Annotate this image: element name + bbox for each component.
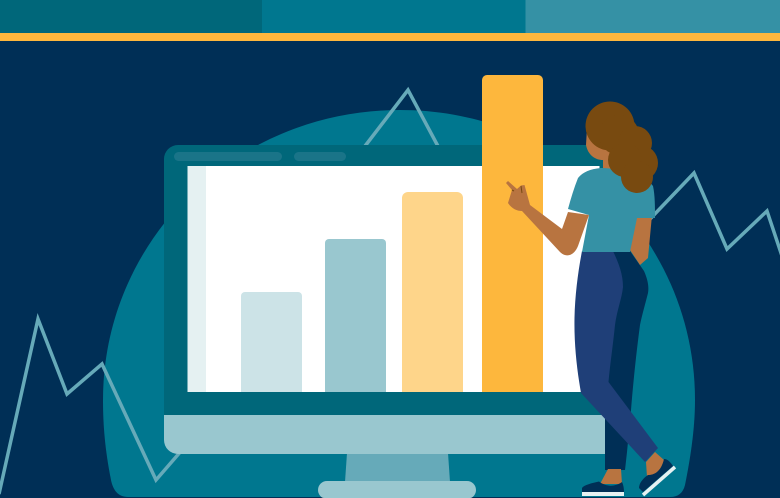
monitor frame	[164, 145, 606, 416]
teal dome background	[103, 110, 695, 497]
far arm	[630, 215, 652, 265]
front sole	[643, 467, 675, 495]
bar chart	[241, 75, 543, 392]
screen sidebar	[188, 166, 206, 392]
header colour bands	[0, 0, 780, 41]
monitor	[164, 145, 606, 498]
front leg	[574, 251, 658, 462]
monitor base	[318, 481, 476, 498]
screen	[188, 166, 600, 392]
back shoe	[582, 482, 624, 492]
hair	[586, 102, 658, 193]
back leg	[590, 251, 648, 470]
monitor chin	[164, 415, 605, 454]
woman	[506, 102, 675, 496]
window title pills	[174, 152, 346, 161]
front shoe	[639, 459, 673, 492]
pointing arm and hand	[506, 181, 589, 255]
finger shadow	[512, 186, 522, 193]
front foot	[646, 452, 664, 477]
back sole	[582, 492, 624, 496]
back foot	[600, 469, 622, 484]
neck and face	[586, 128, 612, 170]
shirt	[568, 168, 655, 252]
monitor stand	[345, 453, 450, 482]
